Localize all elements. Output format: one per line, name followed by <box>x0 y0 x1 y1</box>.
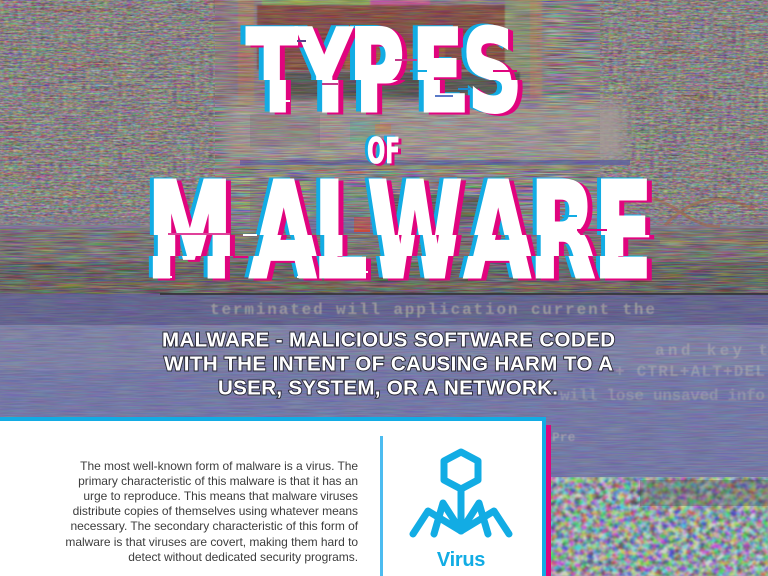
title word: TYPES: TYPES <box>252 5 522 138</box>
virus description text: urge to reproduce. This means that malware viruses <box>83 489 358 503</box>
ghost terminal text <box>210 301 768 445</box>
panel: virus <box>0 417 551 576</box>
virus label: Virus <box>437 549 485 571</box>
title word: TYPES <box>240 24 523 116</box>
title word: OF: OF <box>364 130 397 171</box>
virus description text: distribute copies of themselves using whatever means <box>73 504 358 518</box>
virus description text: The most well-known form of malware is a virus. The <box>80 458 358 472</box>
divider <box>380 436 383 576</box>
monitor screen <box>215 0 542 105</box>
title word: TYPES: TYPES <box>251 7 521 140</box>
coloured scan stripes <box>0 8 768 288</box>
cable <box>640 198 755 226</box>
title word: OF: OF <box>367 131 400 172</box>
subtitle: malware definition: USER, SYSTEM, OR A NETWORK. <box>218 376 558 400</box>
virus description text <box>65 458 358 564</box>
icon: virus <box>410 448 512 538</box>
subtitle: malware definition: MALWARE - MALICIOUS SOFTWARE CODED <box>162 328 615 352</box>
title word: TYPES: TYPES <box>246 5 516 138</box>
virus description text: primary characteristic of this malware is that it has an <box>78 474 358 488</box>
title glitch artifacts <box>153 40 607 278</box>
title word: TYPES: TYPES <box>257 7 527 140</box>
streak overlay on the monitor <box>215 0 600 230</box>
title word: TYPES: TYPES <box>241 4 511 137</box>
title word: TYPES: TYPES <box>247 4 517 137</box>
subtitle: malware definition: WITH THE INTENT OF CAUSING HARM TO A <box>164 352 613 376</box>
ghost terminal text: Pre <box>552 430 576 445</box>
panel shadow edge: magenta <box>546 425 551 576</box>
virus description text: detect without dedicated security programs. <box>128 550 358 564</box>
title word: OF: OF <box>370 133 403 174</box>
keyboard colour blocks <box>310 188 370 218</box>
virus description text: malware is that viruses are covert, making them hard to <box>65 534 358 548</box>
ghost terminal text: and key t <box>655 342 768 360</box>
title: Types of Malware <box>148 24 654 280</box>
ghost terminal text: + CTRL+ALT+DEL <box>615 363 765 381</box>
colourful noise, lower right <box>549 477 768 576</box>
dark scan line <box>160 293 768 295</box>
monitor chin <box>225 102 625 162</box>
dark lower monitor zone <box>0 228 768 295</box>
glitch noise layers <box>0 0 768 294</box>
periwinkle lower area <box>0 294 768 576</box>
subtitle: malware definition <box>162 328 616 400</box>
title word: OF <box>364 130 403 174</box>
virus description text: necessary. The secondary characteristic of this form of <box>71 519 358 533</box>
panel card: white with cyan border <box>0 417 546 576</box>
ghost terminal text: terminated will application current the <box>210 301 655 319</box>
ghost terminal text: will lose unsaved info <box>560 387 765 405</box>
